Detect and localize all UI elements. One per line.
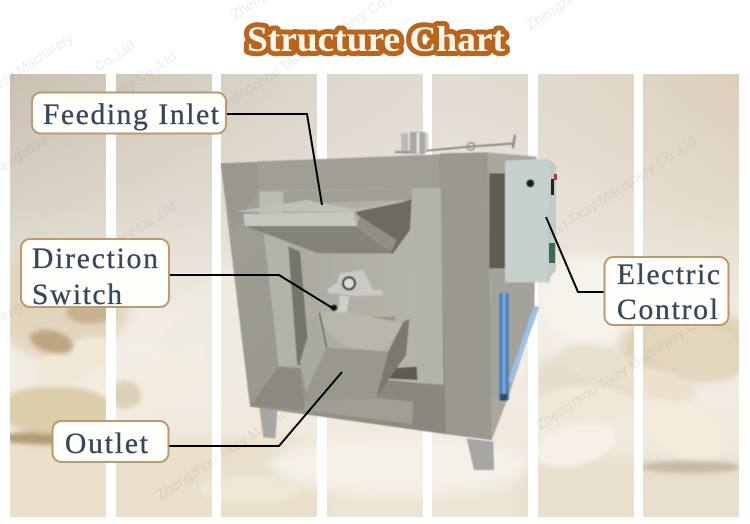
- blue cable ducts: [499, 293, 539, 401]
- electric control box: [505, 159, 550, 282]
- peanut: right lower: [538, 343, 739, 475]
- watermarks: Co.,Ltd: [91, 37, 137, 75]
- label: Direction Switch: [21, 239, 169, 311]
- label: Outlet: [52, 421, 168, 462]
- label: Electric Control: Control: [617, 294, 718, 326]
- label: Direction Switch: Switch: [32, 279, 122, 311]
- chimney and rod: [395, 132, 515, 154]
- title: Structure Chart: [247, 19, 505, 59]
- bearing and switch: [327, 270, 395, 339]
- legs: [259, 407, 494, 470]
- label: Feeding Inlet: Feeding Inlet: [43, 99, 220, 131]
- watermarks: Zhengzhou Taizy Machinery Co.,Ltd: [503, 133, 699, 268]
- side panel: [487, 152, 538, 440]
- front face: [221, 152, 492, 440]
- label: Direction Switch: Direction: [32, 243, 158, 275]
- label: Outlet: Outlet: [65, 428, 149, 460]
- peanut: left lower: [10, 308, 143, 448]
- watermarks: Zhengzhou Taizy Machinery Co.,Ltd: [153, 368, 349, 503]
- outlet chute: [300, 312, 413, 424]
- front opening: [250, 188, 445, 434]
- machine: [221, 132, 550, 470]
- feeding inlet hopper: [235, 199, 412, 254]
- label: Electric Control: Electric: [617, 259, 720, 291]
- electric box side with switches: [546, 160, 557, 283]
- watermarks: Zhengzhou Taizy Machinery Co.,Ltd: [533, 298, 729, 433]
- leader lines: [168, 114, 606, 446]
- label: Electric Control: [604, 257, 728, 326]
